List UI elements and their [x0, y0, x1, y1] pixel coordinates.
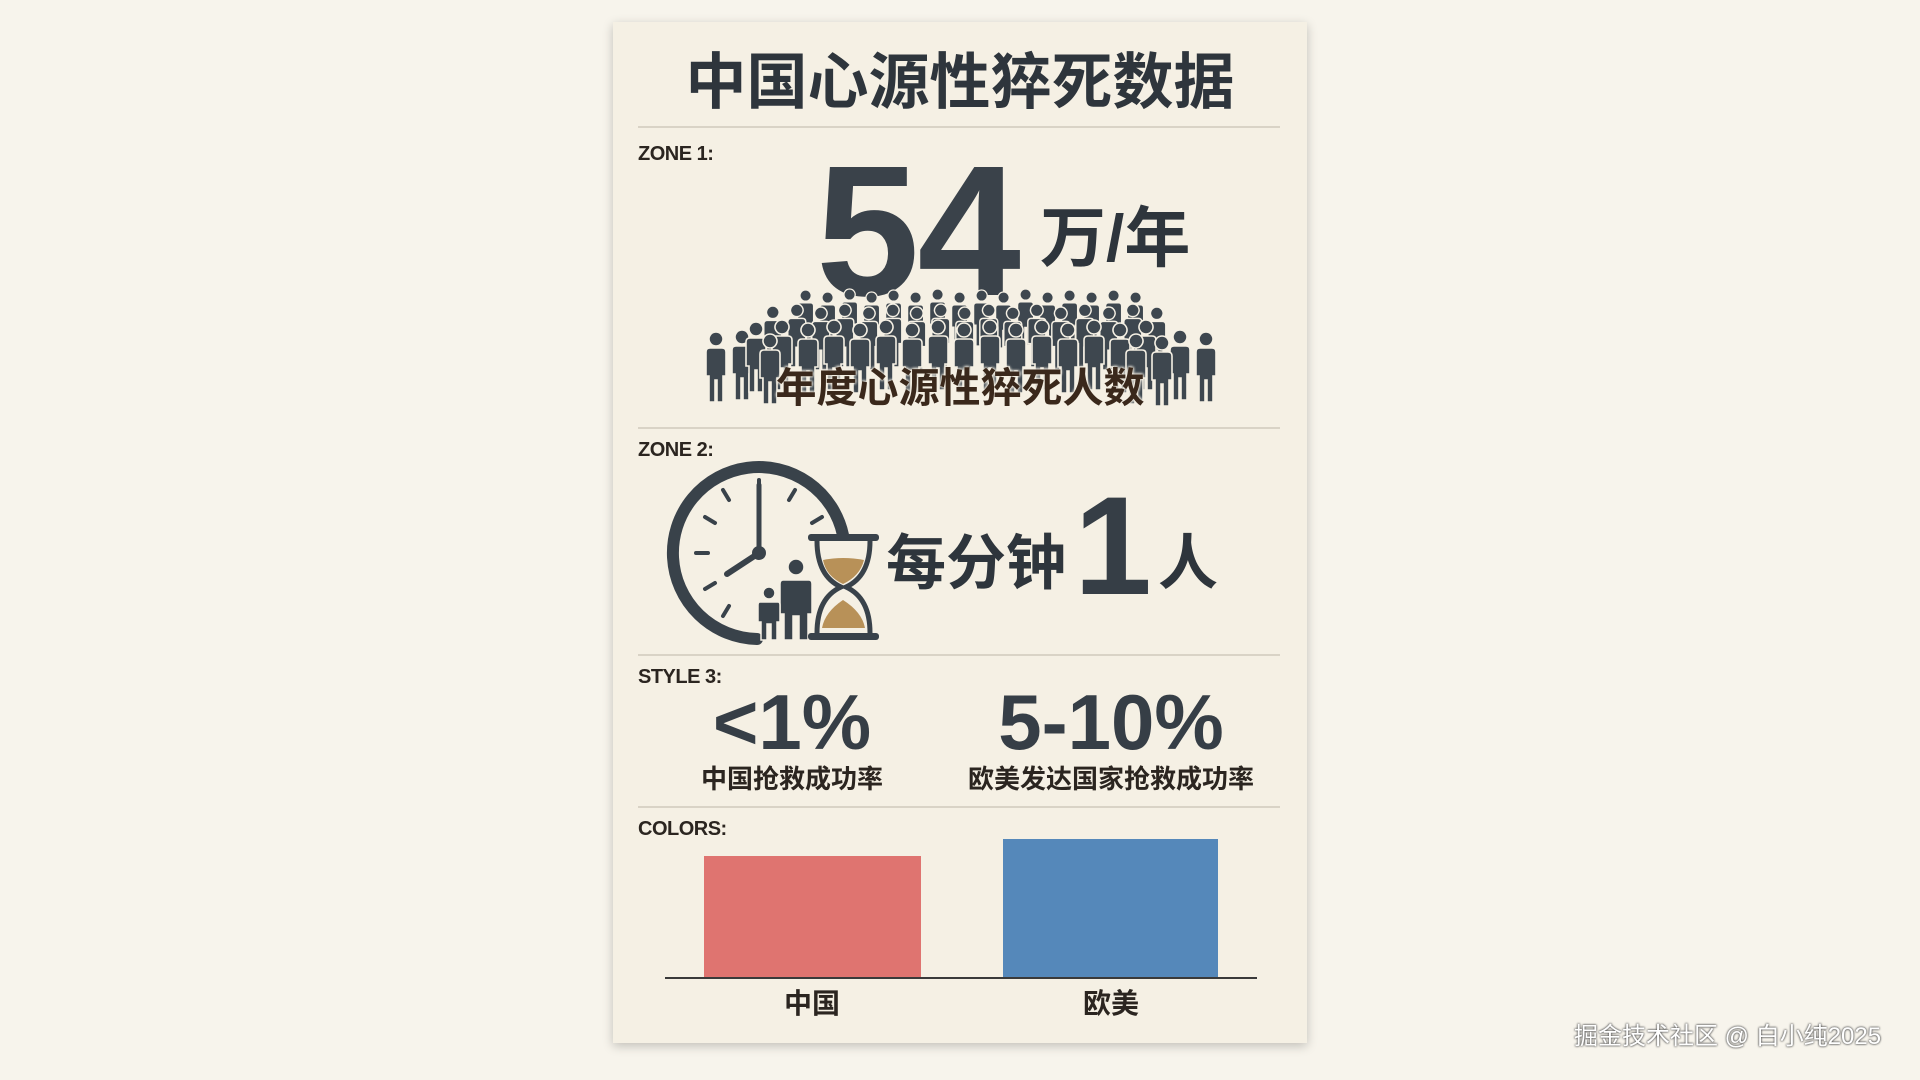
label: style 3: STYLE 3:	[638, 666, 722, 688]
hourglass	[808, 534, 879, 541]
unit 万/年: 万/年	[1040, 201, 1190, 275]
label: zone 2: ZONE 2:	[638, 439, 713, 461]
label: 中国: 中国	[784, 988, 840, 1019]
icon: clock with people and hourglass	[666, 461, 879, 645]
stat: china: 中国抢救成功率	[701, 764, 883, 794]
text: 每分钟1人	[886, 467, 1218, 624]
card panel	[613, 22, 1307, 1043]
title: 中国心源性猝死数据	[685, 48, 1234, 116]
bar: china	[704, 856, 921, 978]
stat: western: 欧美发达国家抢救成功率	[968, 764, 1254, 794]
stat: western	[968, 678, 1254, 794]
text: 每分钟1人: 人	[1158, 530, 1218, 597]
label: zone 1: ZONE 1:	[638, 143, 713, 165]
watermark: 掘金技术社区 @ 白小纯2025	[1574, 1023, 1881, 1050]
big number 54: 54	[816, 128, 1019, 335]
stat: china	[701, 678, 883, 794]
label: 欧美: 欧美	[1083, 988, 1139, 1019]
adult and child	[758, 559, 812, 640]
stat: western: 5-10%	[998, 678, 1224, 766]
stat: china: <1%	[713, 678, 871, 766]
crowd caption: 年度心源性猝死人数	[776, 365, 1144, 411]
bar: west	[1003, 839, 1218, 978]
text: 每分钟1人: 每分钟	[886, 530, 1066, 597]
text: 每分钟1人: 1	[1074, 467, 1152, 624]
bar chart	[665, 839, 1257, 1019]
label: colors: COLORS:	[638, 818, 727, 840]
